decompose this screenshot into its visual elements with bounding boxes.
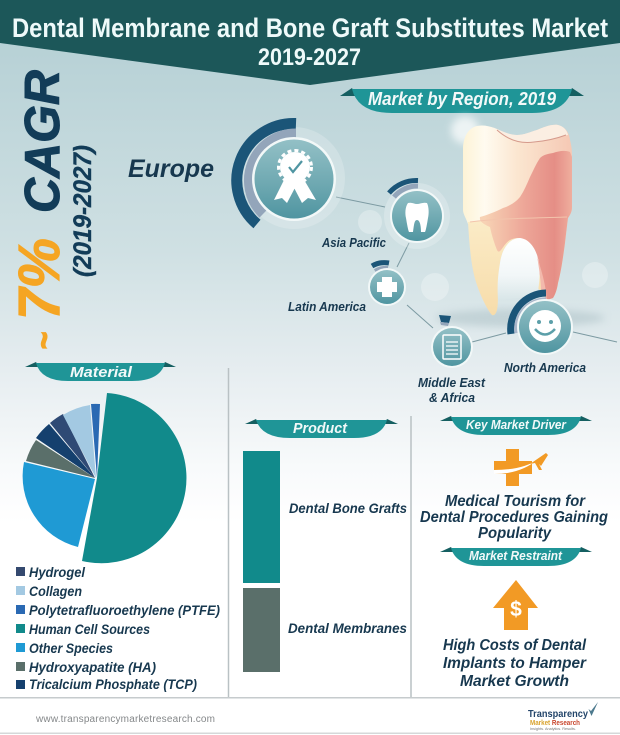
ribbon: product	[245, 419, 398, 438]
slice: human cell sources	[82, 393, 186, 563]
crown rim	[497, 125, 568, 142]
CAGR callout	[7, 69, 97, 350]
crown	[463, 125, 572, 224]
ribbon: key market driver: Key Market Driver	[466, 418, 567, 432]
root base	[468, 216, 568, 315]
inner arch	[498, 238, 540, 300]
legend item: tricalcium phosphate: Tricalcium Phosphate (TCP)	[29, 676, 197, 692]
label: dental membranes: Dental Membranes	[288, 621, 407, 636]
footer	[0, 697, 620, 735]
text: key market driver: Popularity	[478, 525, 552, 542]
tooth illustration	[435, 116, 605, 327]
slice: hydroxyapatite	[26, 440, 95, 478]
text: market restraint	[443, 637, 587, 690]
ribbon: key market driver	[440, 416, 592, 435]
logo: Transparency Market Research: Market Research	[530, 718, 580, 727]
region label: Europe: Europe	[128, 155, 214, 183]
text: market restraint: Implants to Hamper	[443, 655, 587, 672]
legend item: human cell sources: Human Cell Sources	[29, 621, 150, 637]
pie chart: material share	[23, 393, 186, 563]
ribbon: market restraint	[440, 547, 592, 566]
ribbon: material: Material	[70, 364, 133, 381]
pulp	[480, 151, 572, 300]
text: key market driver: Dental Procedures Gaining	[420, 509, 608, 526]
slice: PTFE	[91, 404, 100, 478]
label: dental bone grafts: Dental Bone Grafts	[289, 501, 407, 516]
inner root strip	[537, 256, 547, 300]
legend	[16, 564, 220, 692]
title	[12, 13, 608, 71]
legend item: other species: Other Species	[29, 640, 113, 656]
bar chart: product share	[243, 451, 280, 672]
bar: dental bone grafts	[243, 451, 280, 583]
legend item: collagen: Collagen	[29, 583, 82, 599]
legend item: hydroxyapatite: Hydroxyapatite (HA)	[29, 659, 156, 675]
tilde and percentage: ~	[23, 332, 64, 350]
slice: collagen	[63, 405, 96, 478]
region label: Latin America: Latin America	[288, 300, 366, 314]
text: market restraint: High Costs of Dental	[443, 637, 586, 654]
header banner	[0, 0, 620, 85]
CAGR period: (2019-2027)	[69, 145, 97, 277]
text: key market driver	[420, 493, 608, 542]
decorative bubbles	[358, 210, 608, 301]
legend item: hydrogel: Hydrogel	[29, 564, 86, 580]
title: 2019-2027	[258, 44, 361, 71]
slice: hydrogel	[50, 414, 95, 478]
icon: cost up arrow: $	[510, 598, 522, 621]
website url: www.transparencymarketresearch.com	[35, 714, 215, 725]
slice: tricalcium phosphate	[36, 424, 95, 478]
icon: Latin America medical cross	[368, 263, 406, 306]
ribbon: market restraint: Market Restraint	[469, 549, 563, 563]
legend item: PTFE: Polytetrafluoroethylene (PTFE)	[29, 602, 220, 618]
region label: Middle East and Africa	[418, 376, 486, 405]
text: key market driver: Medical Tourism for	[445, 493, 586, 510]
bar: dental membranes	[243, 588, 280, 672]
logo: Transparency Market Research	[528, 702, 598, 731]
connector lines	[336, 197, 617, 342]
ribbon: market by region: Market by Region, 2019	[368, 89, 556, 109]
CAGR word: CAGR	[16, 69, 70, 213]
region label: Middle East and Africa: & Africa	[429, 391, 475, 405]
tilde and percentage: 7%	[7, 238, 72, 320]
icon: Europe ribbon award	[237, 123, 345, 229]
region label: Asia Pacific: Asia Pacific	[321, 236, 386, 250]
ribbon: material	[25, 362, 176, 381]
logo: Transparency Market Research: Transparency	[528, 708, 588, 720]
icon: North America smile	[511, 293, 573, 355]
ribbon: product: Product	[293, 420, 348, 437]
icon: Asia Pacific tooth	[384, 180, 450, 249]
region label: Middle East and Africa: Middle East	[418, 376, 486, 390]
region label: North America: North America	[504, 361, 586, 375]
logo: Transparency Market Research: Insights. Analytics. Results.	[530, 727, 576, 731]
slice: other species	[23, 462, 95, 547]
icon: medical tourism cross and plane	[494, 449, 548, 486]
ribbon: market by region	[340, 88, 584, 113]
icon: cost up arrow	[493, 580, 538, 630]
icon: Middle East clipboard	[431, 315, 473, 368]
text: market restraint: Market Growth	[460, 673, 569, 690]
